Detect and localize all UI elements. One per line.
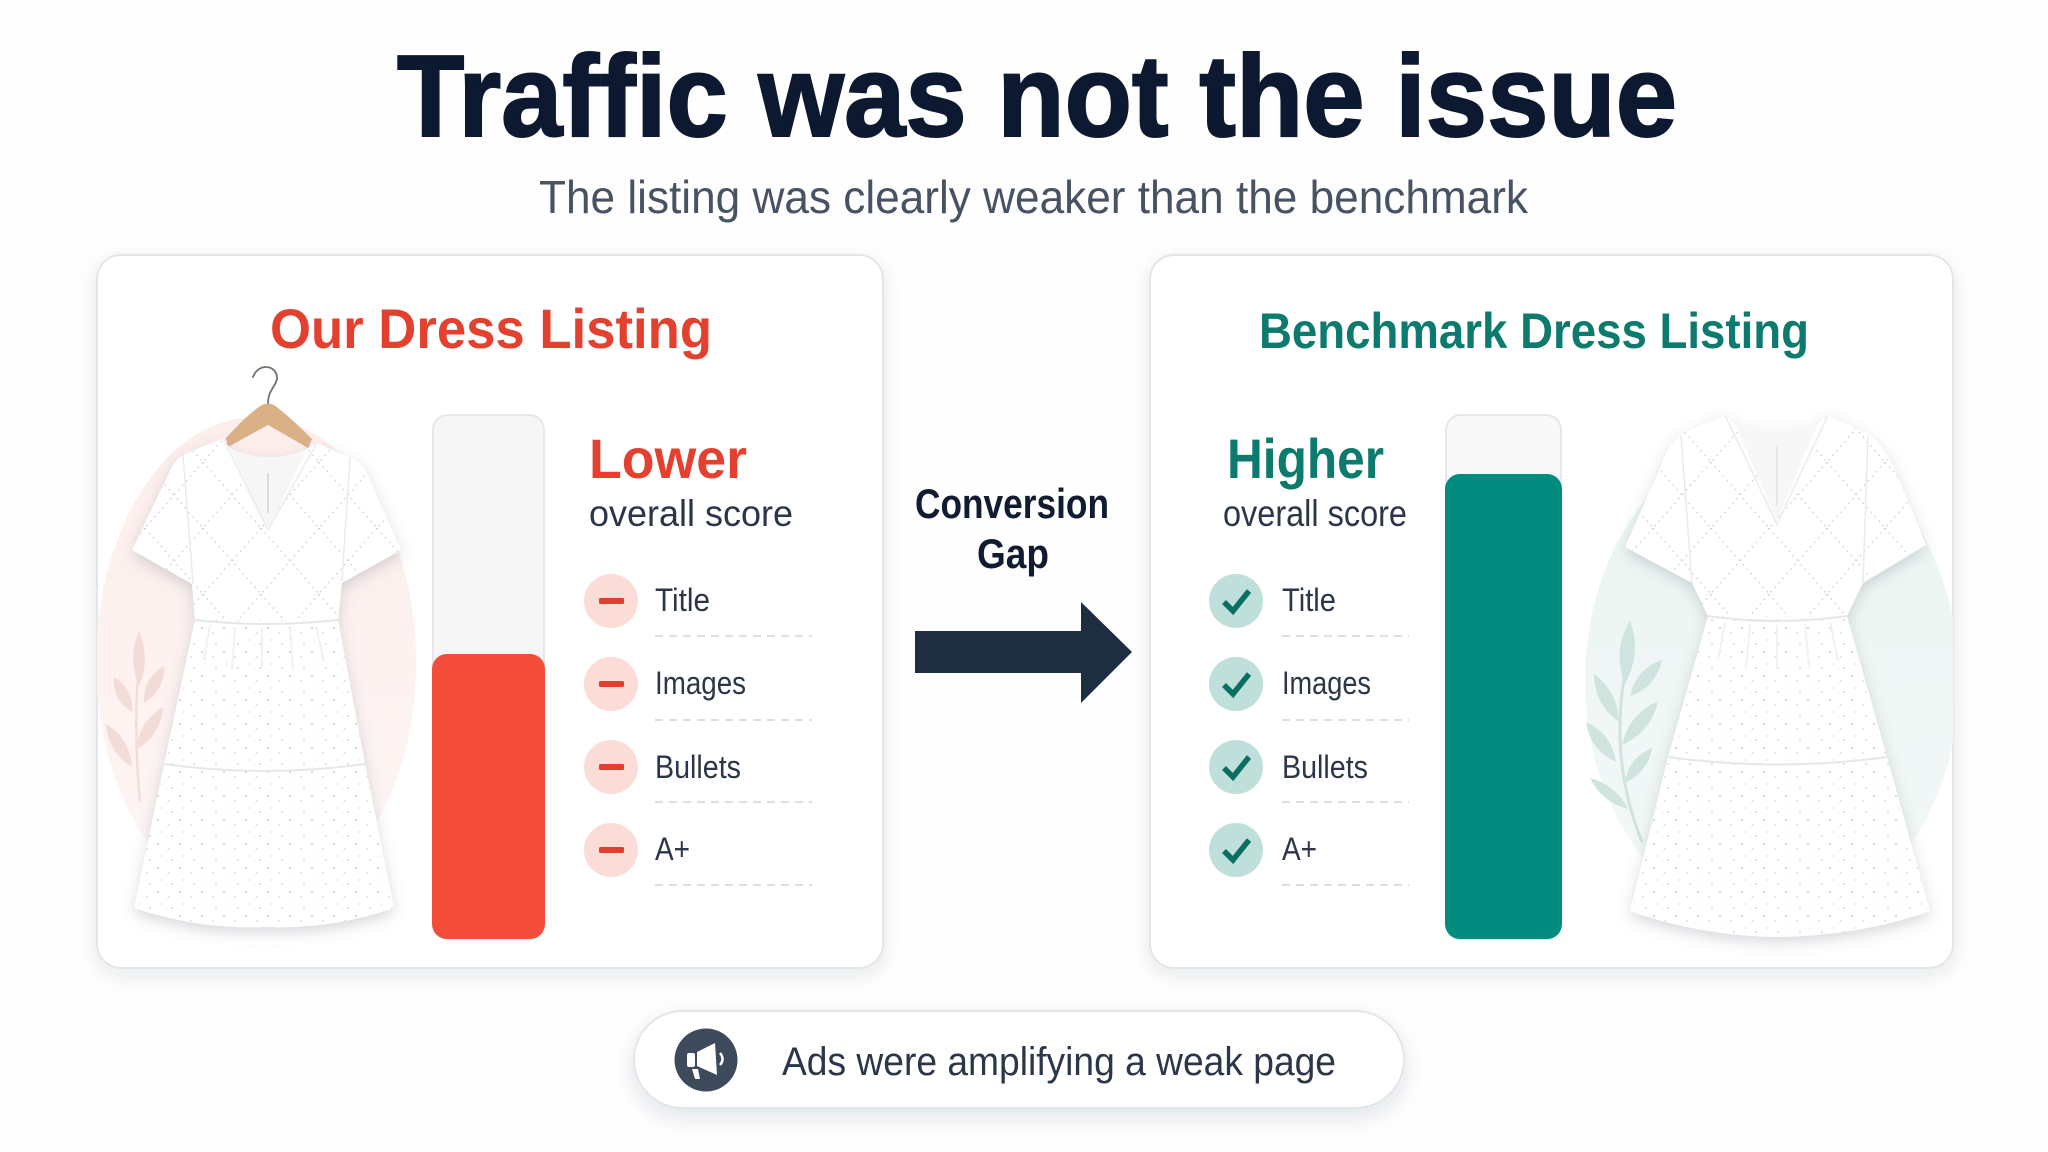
score label: lower: overall score	[589, 493, 793, 534]
row: images: Images	[1282, 665, 1371, 701]
score label: higher: overall score	[1223, 493, 1407, 534]
dress photo left	[132, 438, 401, 927]
row: bullets	[1209, 740, 1409, 802]
conversion gap label	[915, 480, 1109, 577]
subtitle: The listing was clearly weaker than the benchmark	[539, 171, 1529, 223]
panel: benchmark dress listing	[1150, 255, 1959, 968]
score label: higher	[1223, 427, 1407, 534]
score bar: lower	[432, 415, 545, 939]
row: images	[1209, 657, 1409, 720]
icon: megaphone	[674, 1028, 738, 1092]
conversion gap label: Conversion	[915, 480, 1109, 527]
icon: decorative leaf sprig	[1586, 620, 1662, 842]
row: title: Title	[1282, 582, 1336, 618]
panel heading: Our Dress Listing	[270, 297, 712, 360]
icon: decorative leaf sprig	[106, 631, 164, 802]
icon: hanger	[226, 367, 312, 448]
conversion gap label: Gap	[977, 530, 1049, 577]
row: bullets	[584, 740, 812, 802]
callout pill	[634, 1011, 1404, 1108]
score label: higher: Higher	[1227, 427, 1384, 490]
row: title: Title	[655, 582, 710, 618]
row: bullets: Bullets	[655, 749, 741, 785]
row: bullets: Bullets	[1282, 749, 1368, 785]
score label: lower	[589, 427, 793, 534]
score label: lower: Lower	[589, 427, 747, 490]
blush backdrop	[97, 418, 416, 842]
row: a+	[1209, 823, 1409, 885]
criteria list: strong	[1209, 574, 1409, 885]
dress photo right	[1625, 415, 1930, 937]
row: title	[1209, 574, 1409, 636]
callout text: Ads were amplifying a weak page	[782, 1040, 1336, 1084]
criteria list: weak	[584, 574, 812, 885]
mint backdrop	[1585, 500, 1953, 857]
row: title	[584, 574, 812, 636]
arrow	[915, 602, 1132, 703]
row: a+	[584, 823, 812, 885]
score bar: higher	[1445, 415, 1562, 939]
panel heading: Benchmark Dress Listing	[1259, 303, 1809, 359]
title: Traffic was not the issue	[397, 31, 1677, 161]
row: a+: A+	[1282, 831, 1317, 867]
row: a+: A+	[655, 831, 690, 867]
row: images	[584, 657, 812, 720]
row: images: Images	[655, 665, 746, 701]
panel: our dress listing	[96, 255, 883, 968]
